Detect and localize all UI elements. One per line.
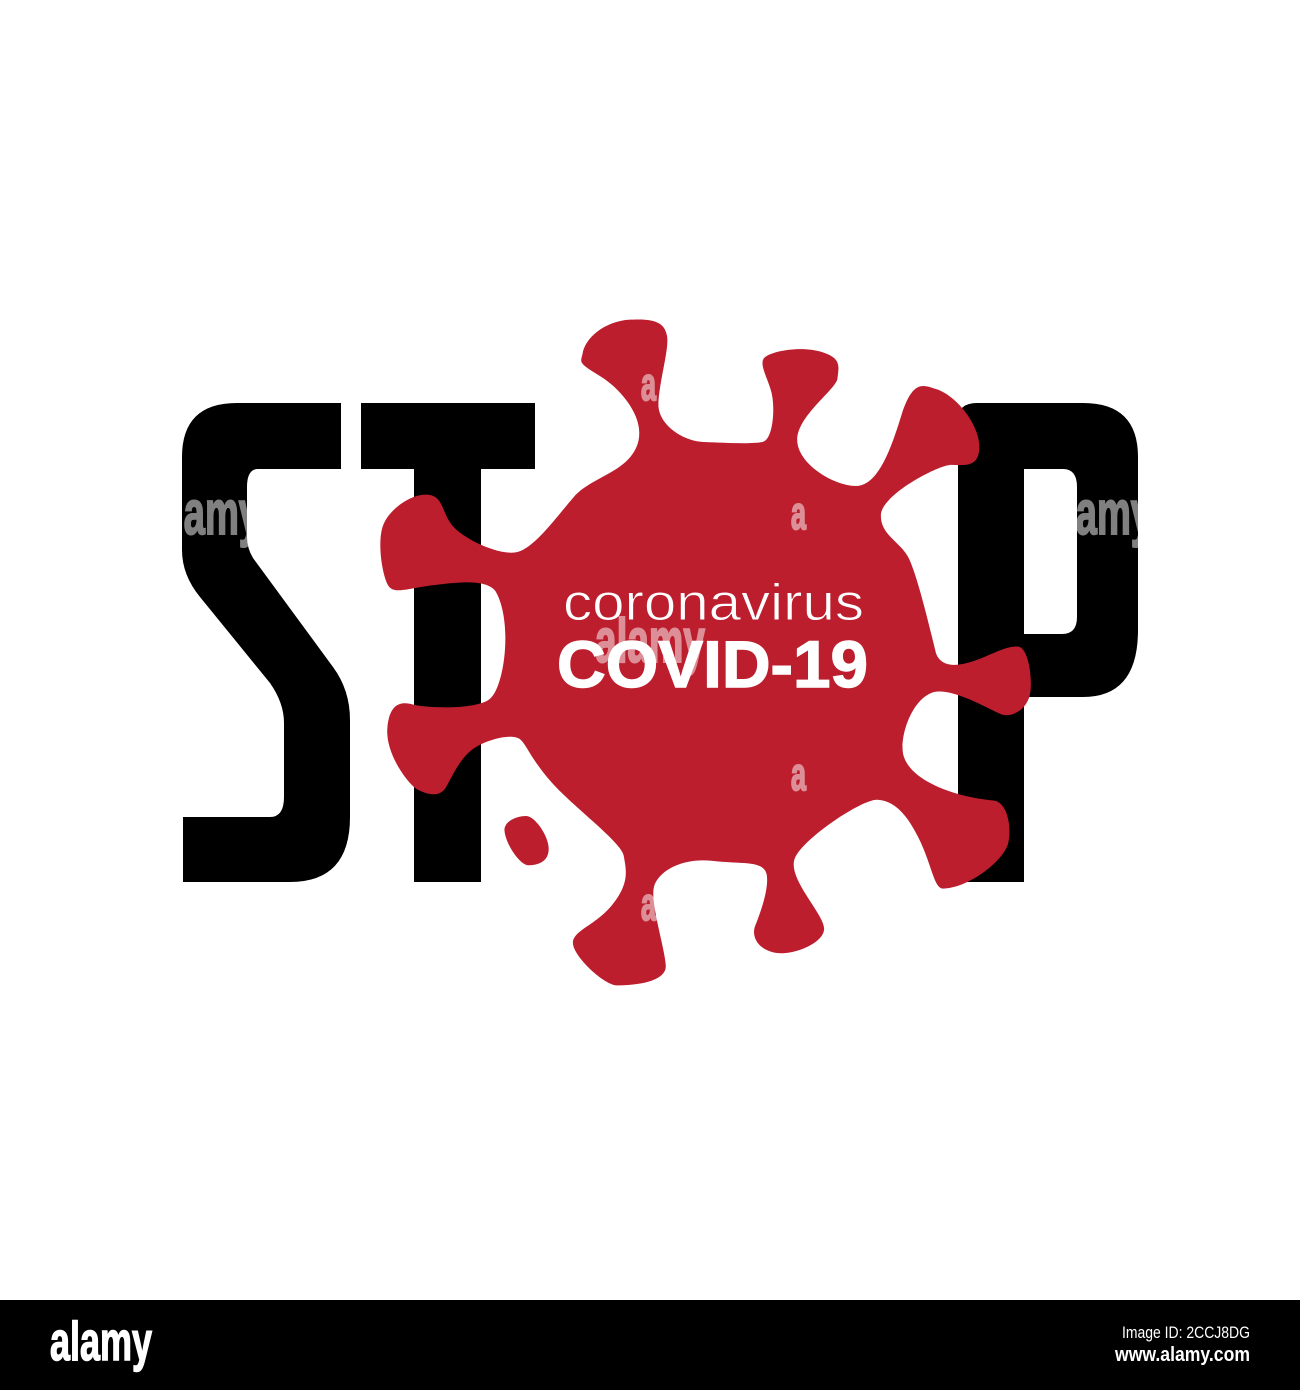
watermark: alamy on S: alamy [152, 479, 260, 548]
footer website: www.alamy.com [1114, 1344, 1250, 1366]
virus icon standing in for the letter O [380, 319, 1031, 985]
footer bar [0, 1300, 1300, 1390]
watermark: alamy at centre: alamy [595, 607, 705, 676]
letter P [958, 403, 1138, 882]
virus droplet [504, 816, 549, 865]
virus body with spikes [380, 319, 1031, 985]
stock watermarks [152, 358, 1152, 930]
title letters: STOP [182, 403, 1138, 882]
headline: COVID-19: COVID-19 [557, 627, 868, 701]
watermark: small a top: a [641, 358, 656, 410]
letter S [182, 403, 350, 882]
watermark: small a lower right: a [791, 748, 806, 800]
footer logo: alamy: alamy [50, 1310, 152, 1372]
footer image id: Image ID: 2CCJ8DG [1122, 1323, 1250, 1342]
watermark: alamy on P: alamy [1044, 479, 1152, 548]
watermark: small a bottom: a [641, 878, 656, 930]
watermark: small a upper right: a [791, 487, 806, 539]
letter T [361, 403, 535, 882]
subtitle: coronavirus: coronavirus [563, 574, 864, 632]
